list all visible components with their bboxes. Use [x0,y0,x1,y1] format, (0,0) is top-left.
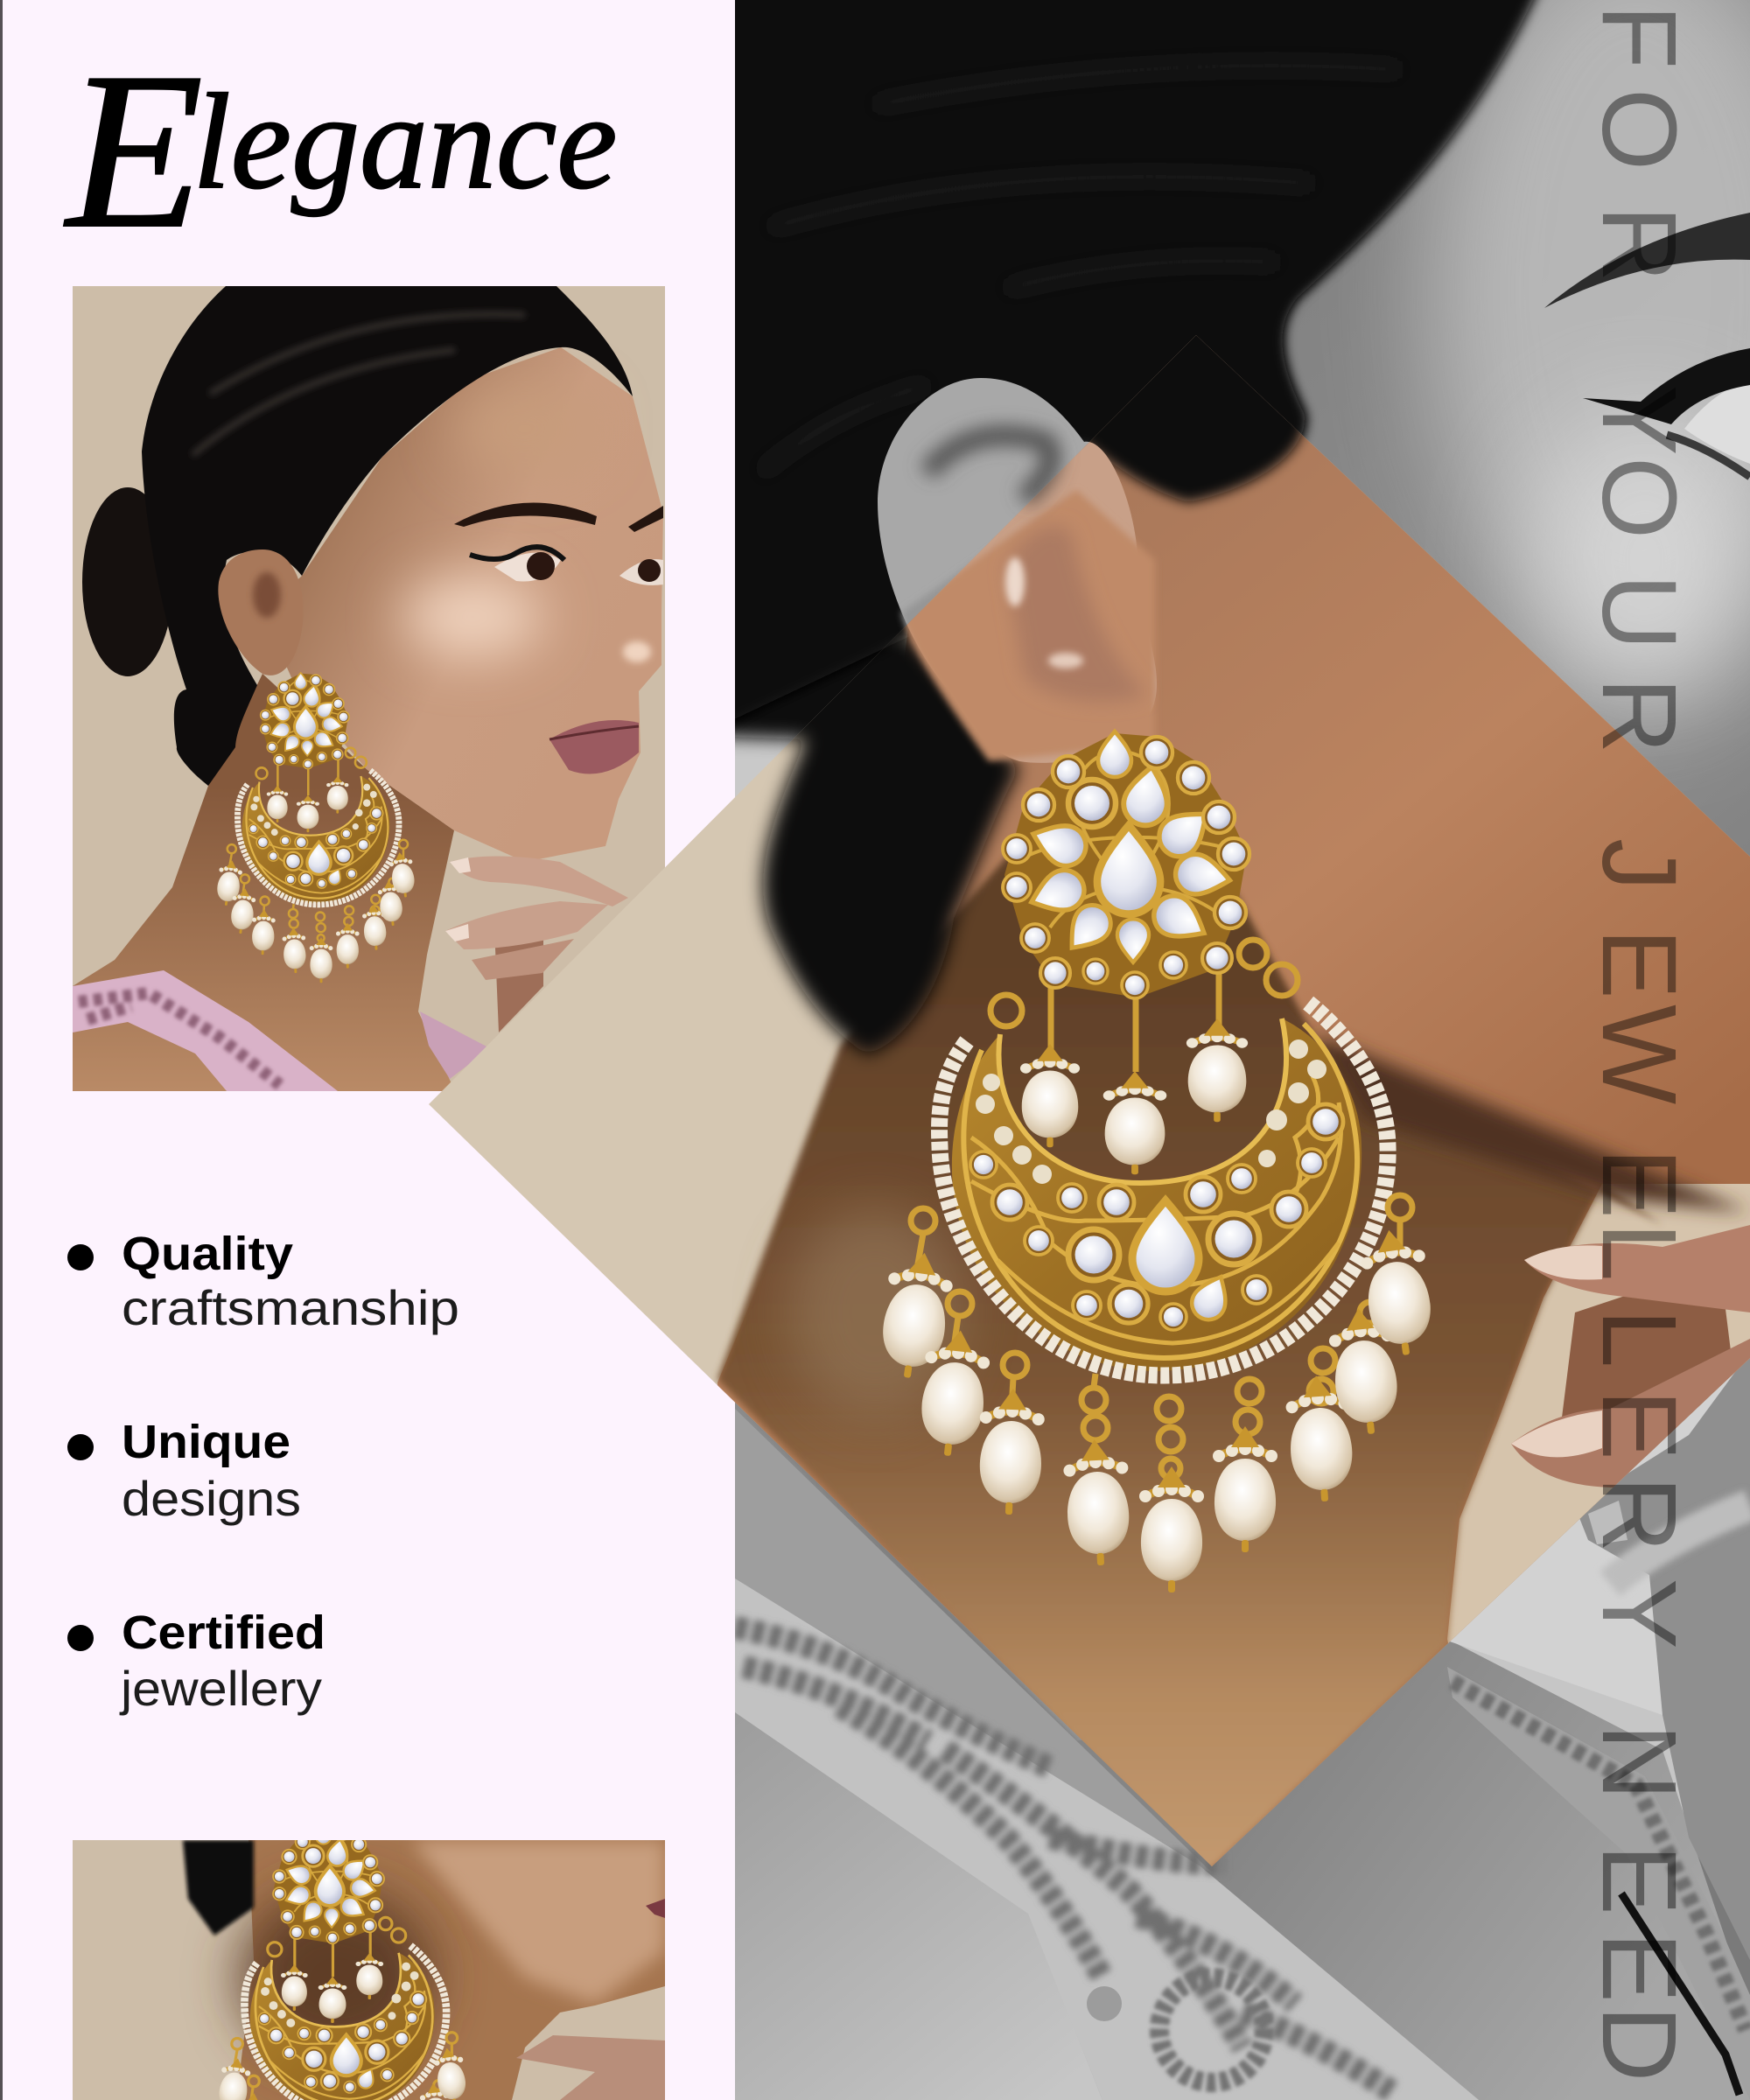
hand in grey [1575,1352,1750,1960]
neck shadow below diamond [735,1409,1212,1872]
bullet: Quality craftsmanship [67,1228,459,1335]
right-side background gap [1447,1184,1750,1838]
nape hair [682,604,1019,1054]
panel: left background [0,0,735,2100]
photo: earring close-up thumbnail [73,1840,665,2100]
dress band with embroidery [735,1578,1479,2100]
hair [183,1840,254,1936]
earring in close-up thumbnail [73,1840,665,2100]
title: Elegance script [64,27,617,275]
hair [142,286,633,786]
fingers [1511,1225,1750,1488]
hair over face tones [682,0,1549,744]
right background patch [1447,1365,1750,1715]
skin [236,1840,665,2100]
jaw shadow [1312,1032,1750,1212]
hand [445,856,628,1032]
neck [718,744,1662,1872]
lips [646,1899,665,1918]
grey face tones [1426,0,1750,709]
bullet: Certified jewellery: Certified [122,1606,326,1659]
bullet: Unique designs [67,1416,301,1526]
background [420,0,1750,2100]
photo: model portrait thumbnail [73,286,665,1091]
vertical slogan text: FOR YOUR JEWELLERY NEED [1580,4,1699,2082]
bullet: Unique designs: Unique [122,1416,290,1468]
eyes brow lips [454,502,663,774]
background right [560,1986,665,2030]
photo: main portrait in grayscale [735,0,1750,2100]
bullet: Certified jewellery [67,1606,326,1716]
face [262,347,663,862]
neck and shoulder [73,674,455,1091]
earring [214,673,417,983]
right strap [1447,1667,1750,2100]
grey ear [878,378,1157,763]
hand [516,2035,665,2100]
ear [878,378,1157,763]
face and neck base [718,0,1750,2100]
earring [875,732,1438,1592]
left edge line [0,0,3,2100]
hair [682,0,1549,744]
title: Elegance script: E [64,27,203,275]
eye [1583,348,1750,477]
bullet list [67,1228,459,1716]
ear [218,550,304,676]
pink dress fragment [1103,1780,1200,1872]
title: Elegance script: legance [192,66,617,217]
photo: colour diamond window over main portrait [420,0,1750,2100]
shoulder [735,1706,1102,2100]
bullet: Quality craftsmanship: Quality [122,1228,293,1280]
bullet: Unique designs: designs [122,1471,301,1526]
bullet: Certified jewellery: jewellery [119,1661,322,1716]
eyebrow [1544,213,1750,308]
chest [910,1639,1750,2100]
dress [73,970,338,1091]
bullet: Quality craftsmanship: craftsmanship [122,1280,459,1335]
bun [82,487,173,676]
